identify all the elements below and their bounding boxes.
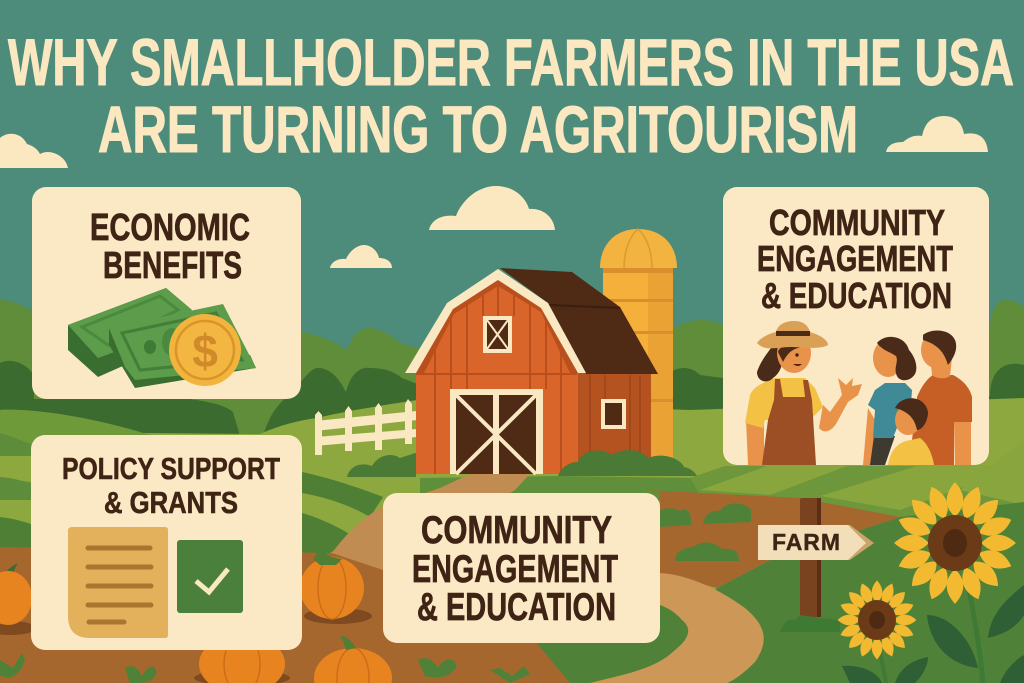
mother: [863, 337, 916, 465]
heading: community engagement and education: [412, 509, 618, 629]
child: [888, 398, 934, 465]
heading: policy support and grants: [62, 451, 280, 520]
card: community engagement centre: [383, 493, 660, 643]
heading: policy support and grants: POLICY SUPPORT: [62, 451, 280, 486]
card: economic benefits: [32, 187, 301, 399]
dirt plot right: [645, 490, 900, 588]
heading: policy support and grants: & GRANTS: [104, 485, 238, 520]
heading: economic benefits: ECONOMIC: [90, 207, 250, 249]
sunflower: small: [838, 581, 916, 659]
heading: community engagement and education: & EDUCATION: [417, 586, 616, 629]
clouds: [0, 116, 988, 268]
bushes: [347, 450, 697, 477]
illustration: farmer talking with family: [745, 321, 972, 465]
garden sprouts: [0, 503, 751, 683]
card: community engagement right: [723, 187, 989, 465]
pumpkin: right of policy card: [300, 551, 372, 624]
heading: economic benefits: [90, 207, 250, 287]
fields: [0, 398, 1024, 683]
sunflower: large: [894, 482, 1016, 604]
barn roof: [500, 268, 658, 374]
pumpkin: bottom centre: [194, 634, 290, 683]
green patch beside path: [530, 600, 700, 683]
sign post: [800, 498, 821, 617]
heading: community engagement and education: & EDUCATION: [761, 275, 952, 316]
barn gable trim: [405, 269, 586, 373]
pumpkin: bottom right: [314, 636, 392, 683]
sunflower stems and leaves: [842, 585, 1024, 683]
grass tuft: [780, 615, 840, 632]
heading: economic benefits: BENEFITS: [103, 245, 242, 287]
sign board: FARM: [772, 529, 840, 555]
pumpkin: left: [0, 563, 36, 635]
icon: document: [68, 527, 168, 638]
barn loft window: [483, 316, 512, 353]
heading: community engagement and education: COMMUNITY: [769, 202, 945, 243]
icon: money stacks and coin: $: [192, 325, 218, 377]
barn: [405, 268, 658, 475]
father: [912, 331, 972, 465]
lower right meadow: [640, 502, 1024, 683]
heading: community engagement and education: ENGAGEMENT: [757, 238, 953, 279]
distant hills: [0, 300, 1024, 440]
dirt plot left: [0, 547, 660, 683]
barn front: [416, 275, 578, 474]
barn side window: [601, 399, 626, 429]
winding path: [332, 474, 764, 683]
icon: approval check: [177, 540, 243, 613]
heading: community engagement and education: ENGAGEMENT: [412, 548, 618, 591]
card: policy support and grants: [31, 435, 302, 650]
heading: community engagement and education: [757, 202, 953, 316]
farmer: [745, 321, 862, 465]
barn door: [450, 389, 543, 474]
sunflower plants: [838, 482, 1024, 683]
barn side wall: [575, 372, 651, 475]
farm signpost: [758, 498, 874, 632]
title: [8, 25, 1014, 166]
pumpkins: [0, 551, 392, 683]
icon: money stacks and coin: [68, 288, 256, 388]
heading: community engagement and education: COMMUNITY: [421, 509, 612, 552]
fence: [315, 399, 417, 455]
silo: [600, 229, 677, 460]
